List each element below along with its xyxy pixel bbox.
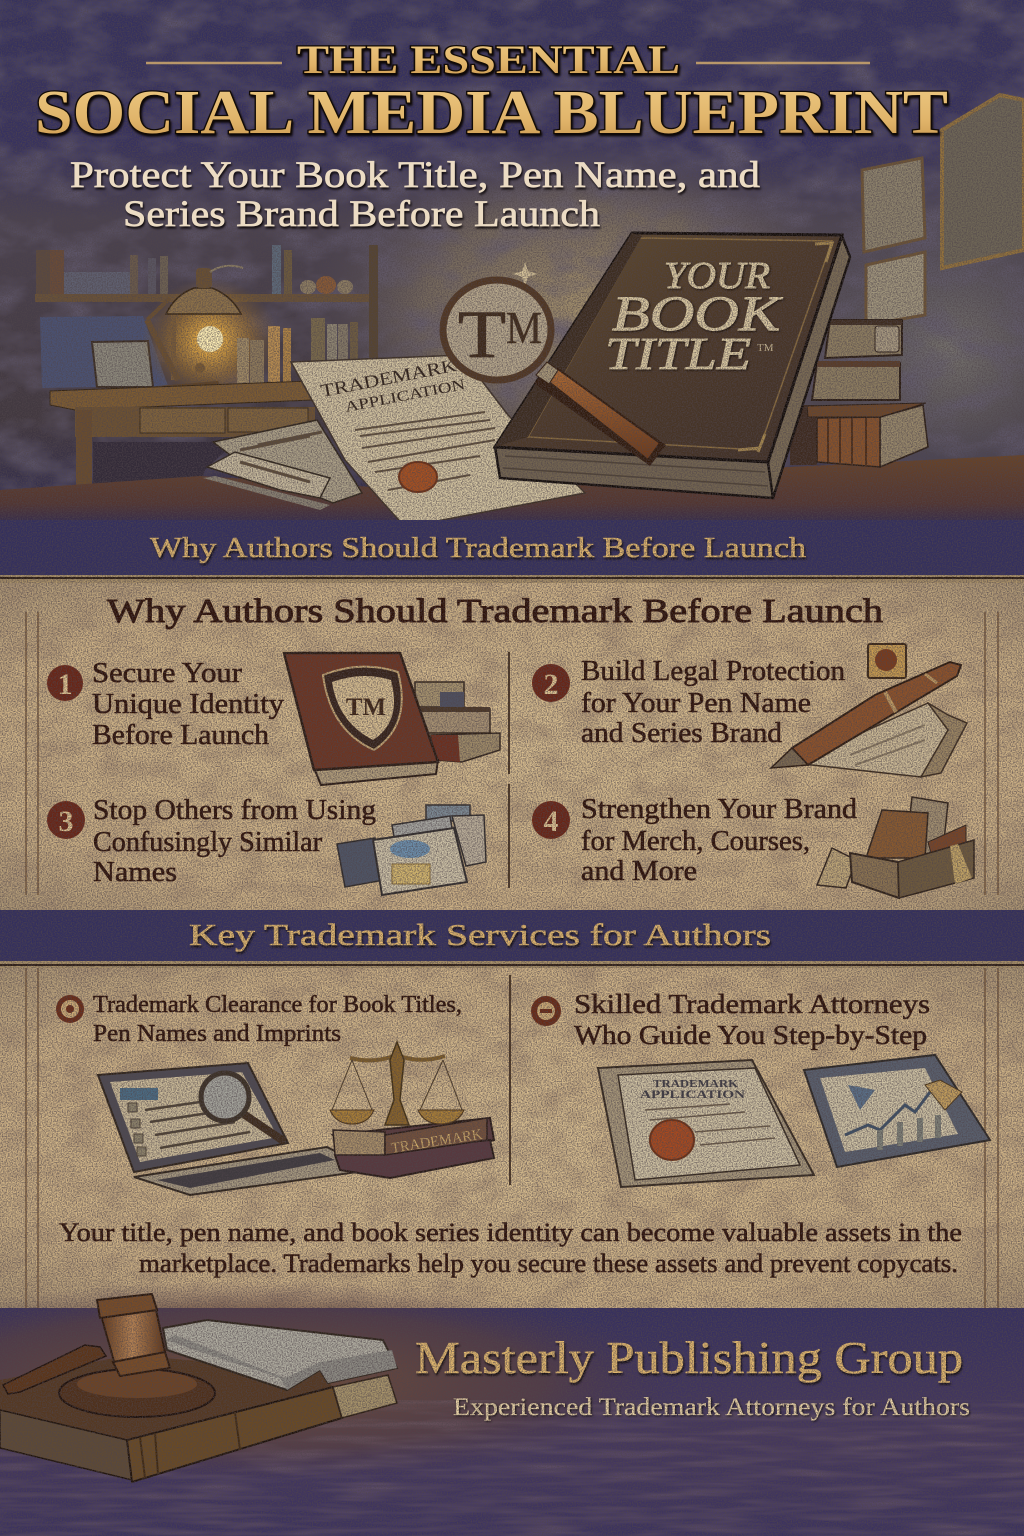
item 2: legal protection (532, 644, 967, 777)
item 2 text: for Your Pen Name (581, 688, 811, 719)
closing paragraph: marketplace. Trademarks help you secure these assets and prevent copycats. (139, 1249, 958, 1278)
trademark application paper: APPLICATION (344, 377, 467, 416)
desk lamp (142, 266, 291, 402)
hero title block (35, 37, 948, 235)
footer panel (0, 1280, 1024, 1536)
icon: fountain pen (771, 662, 961, 768)
icon: badge (531, 996, 561, 1026)
company name: Masterly Publishing Group (415, 1332, 963, 1383)
navy banner: why authors: Why Authors Should Trademark Before Launch (150, 532, 807, 564)
framed certificates on wall (862, 95, 1024, 325)
panel: why authors should trademark (0, 575, 1024, 910)
item 4: strengthen brand (532, 794, 974, 898)
icon: small stamp (868, 644, 906, 678)
icon: tablet with growth chart (804, 1055, 990, 1167)
icon: trademark shield book (284, 653, 438, 785)
open book (163, 1320, 397, 1390)
icon: scales on books (330, 1042, 494, 1178)
item 2 text: and Series Brand (581, 718, 782, 749)
wax seal (650, 1120, 694, 1160)
trademark application paper: TRADEMARK (319, 355, 458, 401)
item 3 text: Confusingly Similar (93, 827, 323, 858)
magnifying glass with TM: T (458, 296, 506, 372)
navy banner: why authors (0, 520, 1024, 576)
icon: application papers (598, 1060, 814, 1187)
magnifying glass with TM (443, 262, 666, 466)
item 3: stop similar names (47, 795, 486, 895)
stack of books (790, 320, 928, 467)
service 1: clearance (56, 992, 494, 1195)
item 3 text (93, 795, 376, 888)
item 3 text: Names (93, 857, 177, 888)
subtitle: Protect Your Book Title, Pen Name, and (70, 155, 761, 196)
number badge 4 (532, 801, 570, 839)
loose papers (203, 420, 362, 510)
navy banner: key trademark services (0, 910, 1024, 962)
magnifying glass with TM: M (506, 302, 542, 353)
subtitle: Series Brand Before Launch (123, 194, 601, 235)
trademark application paper (291, 355, 585, 527)
item 4 text: for Merch, Courses, (581, 826, 810, 857)
icon: application papers: TRADEMARK (653, 1078, 739, 1090)
item 4 text: and More (581, 856, 697, 887)
number badge 3: 3 (58, 805, 74, 838)
number badge 1 (47, 665, 83, 701)
service 1 text: Trademark Clearance for Book Titles, (93, 992, 462, 1018)
item 1 text (92, 658, 284, 751)
closing paragraph: Your title, pen name, and book series identity can become valuable assets in the (59, 1218, 962, 1247)
icon: law book, open book and gavel (0, 1294, 397, 1482)
service 2 text: Who Guide You Step-by-Step (574, 1020, 927, 1050)
navy banner: key trademark services: Key Trademark Services for Authors (189, 917, 771, 952)
item 1 text: Secure Your (92, 658, 243, 689)
icon: target badge (56, 995, 84, 1023)
large book: your book title (495, 233, 850, 498)
service 1 text (93, 992, 462, 1047)
closing paragraph (59, 1218, 962, 1278)
icon: trademark shield book: TM (346, 694, 386, 721)
icon: application papers: APPLICATION (640, 1087, 745, 1101)
title: social media blueprint: SOCIAL MEDIA BLUEPRINT (35, 79, 948, 147)
service 1 text: Pen Names and Imprints (93, 1021, 341, 1047)
icon: merch box (817, 797, 974, 898)
item 4 text: Strengthen Your Brand (581, 794, 857, 825)
item 2 text (581, 656, 845, 749)
wooden desk (50, 381, 315, 488)
icon: brand cards (337, 805, 486, 895)
panel: key services (0, 961, 1024, 1310)
table (0, 455, 1024, 524)
bookshelf (35, 245, 378, 395)
large book: your book title: BOOK (612, 285, 783, 341)
gavel (59, 1369, 215, 1417)
item 1: secure identity (47, 653, 500, 785)
large book: your book title: YOUR (664, 255, 770, 297)
subtitle (70, 155, 761, 235)
item 2 text: Build Legal Protection (581, 656, 845, 687)
number badge 1: 1 (58, 668, 72, 701)
hero illustration (0, 0, 1024, 560)
large book: your book title: TM (757, 342, 774, 354)
service 2: attorneys (531, 989, 990, 1187)
number badge 3 (47, 801, 85, 839)
title: the essential: THE ESSENTIAL (297, 37, 680, 82)
service 2 text: Skilled Trademark Attorneys (574, 989, 930, 1019)
item 1 text: Unique Identity (92, 689, 284, 720)
item 4 text (581, 794, 857, 887)
item 1 text: Before Launch (92, 720, 269, 751)
blue wall panel with frame (40, 316, 168, 388)
large book: your book title: TITLE (605, 328, 751, 379)
number badge 4: 4 (544, 805, 558, 838)
number badge 2: 2 (544, 668, 558, 701)
service 2 text (574, 989, 930, 1050)
item 3 text: Stop Others from Using (93, 795, 376, 826)
panel heading: Why Authors Should Trademark Before Launch (107, 593, 883, 630)
icon: books behind (415, 682, 500, 762)
wax seal (399, 462, 437, 492)
icon: laptop with magnifier (98, 1063, 372, 1195)
icon: documents (794, 703, 967, 777)
icon: scales on books: TRADEMARK (390, 1127, 484, 1157)
tagline: Experienced Trademark Attorneys for Authors (453, 1394, 970, 1421)
number badge 2 (532, 664, 570, 702)
